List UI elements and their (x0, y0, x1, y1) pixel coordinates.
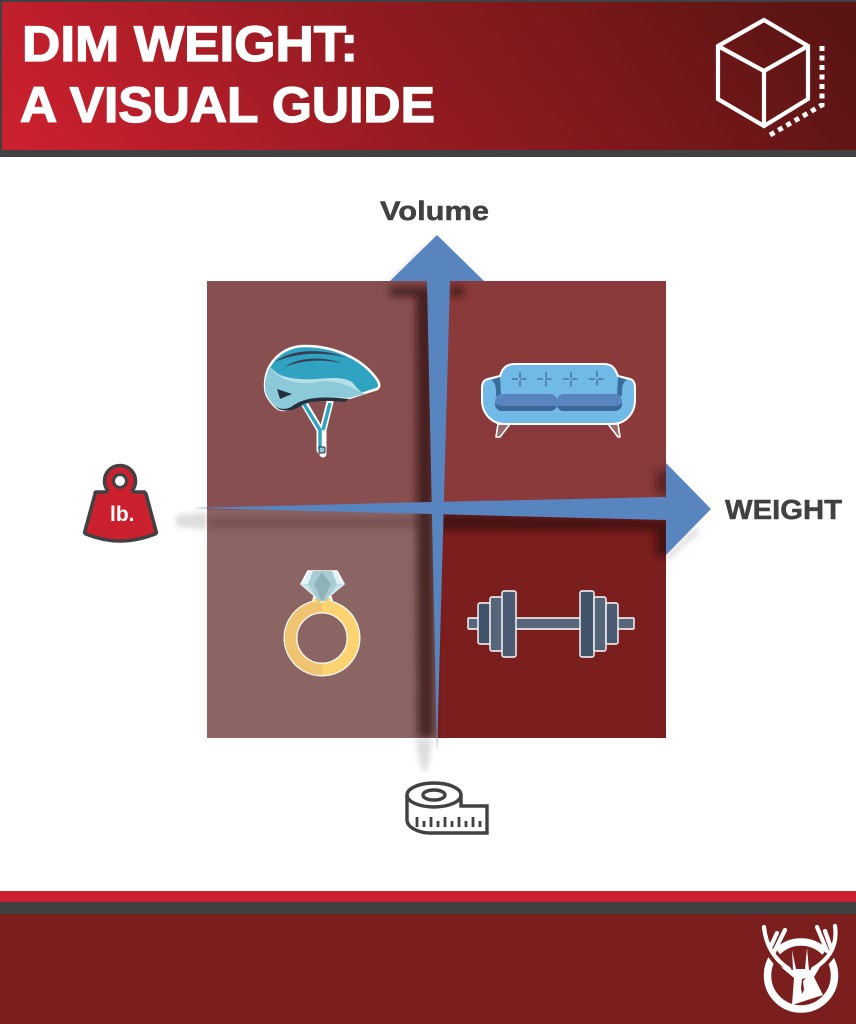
icon: pound weight: lb. (110, 503, 134, 526)
horizontal weight arrow (192, 463, 711, 555)
title: A VISUAL GUIDE (20, 77, 435, 133)
arrow shadows on the matrix (207, 287, 672, 738)
title (20, 16, 435, 133)
quadrant: low weight high volume (207, 281, 438, 510)
header banner (0, 0, 856, 157)
vertical volume arrow (390, 235, 484, 752)
icon: box with dimension lines (718, 20, 822, 135)
icon: sofa (482, 364, 635, 437)
quadrant: high weight low volume (438, 510, 666, 738)
quadrant: low weight low volume (207, 510, 438, 738)
title: DIM WEIGHT: (22, 16, 358, 72)
icon: stag logo (764, 926, 836, 1009)
axis label: volume: Volume (380, 196, 489, 226)
axis label: weight: WEIGHT (725, 494, 842, 525)
arrow shadows outside the matrix (176, 246, 700, 770)
icon: diamond ring (290, 571, 354, 670)
quadrant matrix (207, 281, 666, 738)
icon: barbell (468, 591, 634, 657)
icon: measuring tape (407, 783, 487, 833)
footer band (0, 891, 856, 1024)
icon: pound weight (85, 466, 156, 541)
quadrant: high weight high volume (438, 281, 666, 510)
icon: bicycle helmet (265, 346, 379, 454)
